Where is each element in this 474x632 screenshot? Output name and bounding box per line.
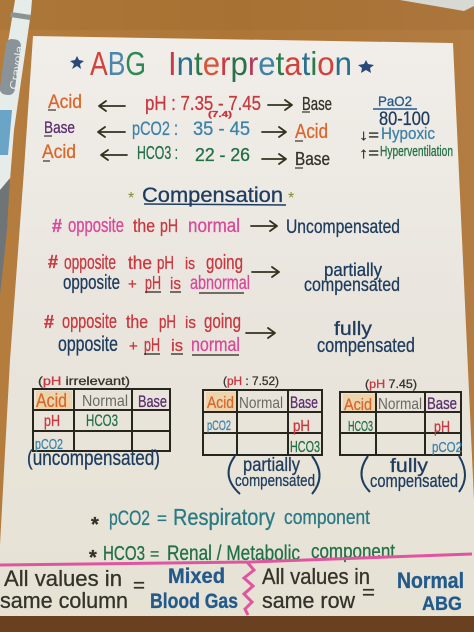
title (70, 45, 374, 82)
note: pCO2 respiratory (91, 504, 370, 536)
paper scrap top right (400, 0, 474, 11)
table: fully compensated: fully (390, 456, 429, 477)
note: pCO2 respiratory: Respiratory (173, 504, 275, 530)
footer: normal ABG: same row (262, 588, 355, 613)
rule: partially compensated: is (185, 254, 195, 273)
title: Interpretation (168, 45, 352, 82)
rule: uncompensated: Uncompensated (286, 217, 400, 238)
PaO2 side note: 80-100 (379, 109, 430, 130)
rule: uncompensated: # (52, 216, 62, 236)
table: partially compensated: partially (243, 455, 300, 476)
crayon: Crayola (8, 44, 26, 90)
table: uncompensated (27, 374, 171, 470)
rule: fully compensated: pH (144, 335, 160, 355)
note: HCO3 renal (89, 541, 395, 569)
rule: partially compensated: + (128, 276, 137, 293)
table: uncompensated: (uncompensated) (27, 447, 160, 470)
rule: fully compensated: compensated (317, 335, 415, 357)
rule: uncompensated: normal (188, 216, 240, 237)
PaO2 side note: Hypoxic (381, 124, 435, 143)
PaO2 side note (359, 93, 453, 162)
rule: partially compensated: partially (324, 260, 382, 280)
rule: partially compensated (48, 252, 400, 296)
note: pCO2 respiratory: = (157, 509, 167, 528)
rule: partially compensated: opposite (63, 272, 120, 294)
table: fully compensated: pH (434, 419, 450, 436)
note: HCO3 renal: HCO3 (103, 543, 145, 565)
rule: fully compensated: is (185, 313, 196, 332)
rule: fully compensated: is (171, 336, 183, 355)
row: HCO3 (42, 142, 330, 169)
rule: partially compensated: the (128, 253, 152, 273)
row: pCO2: Acid (295, 121, 328, 143)
star left (70, 56, 84, 69)
footer: normal ABG: Normal (397, 568, 464, 593)
rule: partially compensated: # (48, 252, 58, 272)
rule: fully compensated: fully (334, 319, 373, 340)
table: partially compensated: Normal (239, 395, 283, 412)
compensation heading: * (128, 190, 134, 207)
row: pH (48, 92, 332, 119)
rule: partially compensated: compensated (304, 275, 400, 296)
table: fully compensated: (pH 7.45) (365, 377, 417, 391)
rule: fully compensated: the (126, 312, 148, 332)
note: pCO2 respiratory: pCO2 (109, 507, 150, 530)
table: partially compensated: Base (290, 393, 318, 412)
compensation heading: Compensation (142, 184, 283, 207)
note: pCO2 respiratory: * (91, 514, 99, 536)
rule: fully compensated: + (129, 338, 138, 355)
note: HCO3 renal: component (311, 541, 395, 563)
footer: normal ABG: = (362, 582, 375, 604)
table: partially compensated: HCO3 (290, 439, 320, 456)
table: partially compensated: pH (293, 418, 310, 435)
rule: partially compensated: pH (145, 273, 161, 293)
footer: normal ABG: All values in (262, 564, 370, 589)
table: uncompensated: Base (138, 392, 167, 411)
table: fully compensated: Base (427, 394, 457, 413)
compensation heading: * (288, 190, 294, 207)
star right (358, 60, 374, 73)
rule: fully compensated (44, 311, 415, 357)
table: uncompensated: (pH irrelevant) (38, 374, 130, 388)
row: pH: (7.4) (208, 110, 232, 119)
rule: partially compensated: abnormal (190, 273, 250, 294)
PaO2 side note: ↑= (359, 145, 379, 162)
table: uncompensated: pCO2 (35, 436, 63, 453)
rule: uncompensated: opposite (68, 215, 124, 237)
rule: fully compensated: opposite (62, 311, 117, 333)
row: HCO3: Base (295, 149, 330, 169)
rule: fully compensated: # (44, 312, 54, 332)
row: pCO2 (44, 118, 328, 143)
PaO2 side note: PaO2 (378, 93, 412, 109)
footer: mixed blood gas: = (133, 575, 145, 597)
rule: uncompensated: the (133, 216, 155, 236)
footer: mixed blood gas: Blood Gas (150, 590, 238, 613)
table: fully compensated: HCO3 (348, 418, 373, 435)
row: pCO2: pCO2 : (132, 119, 178, 140)
footer: mixed blood gas: Mixed (168, 565, 225, 588)
rule: fully compensated: opposite (58, 333, 118, 356)
table: uncompensated: Acid (36, 391, 67, 412)
footer: mixed blood gas: All values in (4, 566, 122, 591)
table: partially compensated: pCO2 (207, 417, 231, 433)
rule: partially compensated: pH (157, 253, 174, 273)
table: partially compensated: compensated (235, 471, 315, 490)
note: HCO3 renal: Renal / Metabolic (167, 542, 300, 565)
note: pCO2 respiratory: component (284, 507, 370, 529)
note: HCO3 renal: = (150, 546, 159, 563)
rule: fully compensated: going (204, 311, 241, 333)
note: HCO3 renal: * (89, 547, 97, 569)
rule: uncompensated: pH (160, 216, 178, 236)
row: HCO3: 22 - 26 (195, 145, 250, 165)
rule: fully compensated: normal (191, 335, 240, 356)
rule: partially compensated: opposite (64, 252, 116, 274)
table: partially compensated: Acid (207, 393, 234, 412)
rule: partially compensated: going (206, 252, 243, 274)
row: pH: Acid (48, 92, 82, 113)
row: pCO2: Base (44, 118, 75, 137)
rule: partially compensated: is (170, 274, 181, 293)
rule: fully compensated: pH (159, 312, 176, 332)
table: uncompensated: Normal (82, 393, 128, 410)
table: fully compensated (340, 377, 465, 492)
rule: uncompensated (52, 215, 400, 238)
table: uncompensated: HCO3 (86, 411, 118, 430)
table: partially compensated (203, 374, 322, 494)
title: ABG (90, 45, 146, 82)
footer: normal ABG: ABG (422, 594, 462, 615)
footer: mixed blood gas (0, 565, 238, 613)
row: HCO3: Acid (42, 142, 76, 163)
table: uncompensated: pH (44, 413, 60, 430)
table: fully compensated: Acid (344, 395, 372, 414)
footer: mixed blood gas: same column (0, 588, 128, 613)
crayon (0, 0, 32, 295)
row: pCO2: 35 - 45 (193, 119, 250, 140)
row: HCO3: HCO3 : (137, 143, 178, 163)
table: partially compensated: (pH : 7.52) (223, 374, 279, 388)
footer: normal ABG (262, 564, 464, 615)
table: fully compensated: pCO2 (432, 439, 462, 456)
PaO2 side note: ↓= (359, 127, 379, 144)
row: pH: Base (302, 94, 332, 114)
normal ranges table (42, 92, 332, 169)
table: fully compensated: Normal (378, 396, 422, 413)
pink divider lines (0, 554, 472, 615)
row: pH: pH : 7.35 - 7.45 (145, 93, 261, 115)
